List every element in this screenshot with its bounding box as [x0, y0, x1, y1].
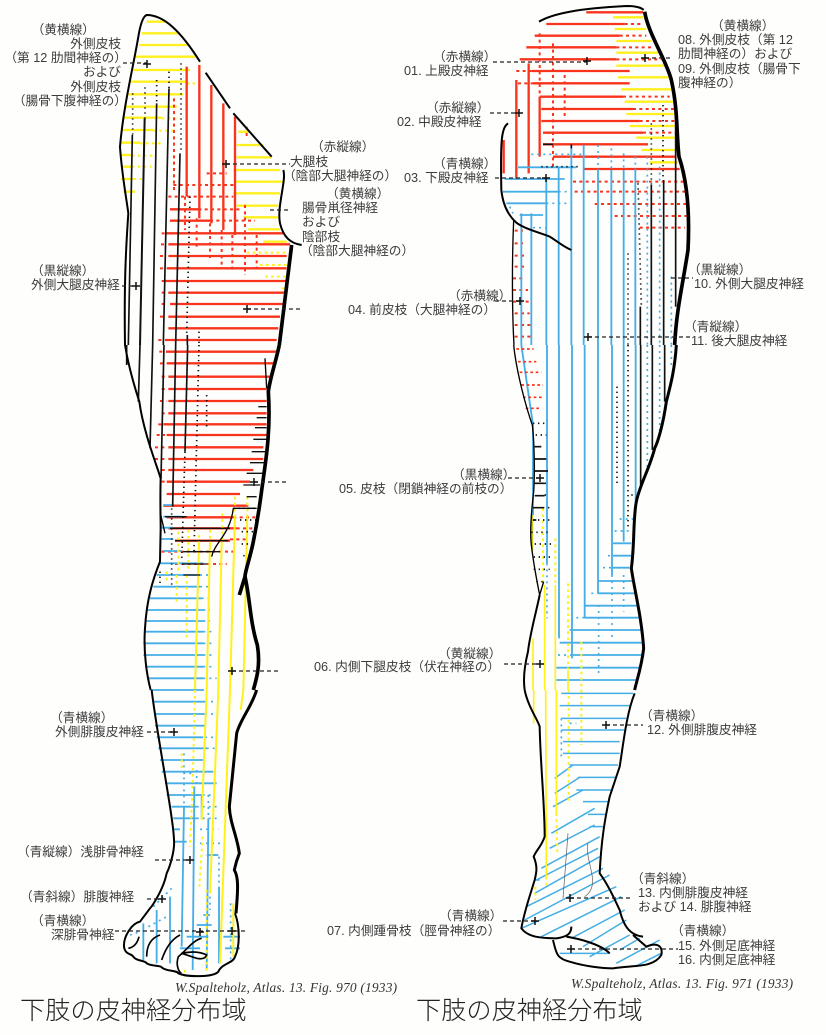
label: lateral sural cutaneous nerve, left: 外側腓腹皮神経	[55, 724, 144, 739]
label: deep peroneal nerve	[31, 913, 115, 942]
label: deep peroneal nerve: （青横線）	[31, 913, 94, 928]
label: femoral branch, left	[283, 139, 397, 183]
label: 01 superior cluneal nerve: 01. 上殿皮神経	[404, 64, 489, 78]
label: lateral femoral cutaneous nerve, left: 外側大腿皮神経	[31, 278, 120, 292]
title: left: 下肢の皮神経分布域	[20, 997, 247, 1025]
label: 15 and 16 plantar nerves	[671, 923, 776, 967]
label: 08 and 09 lateral cutaneous branches: 09. 外側皮枝（腸骨下	[678, 62, 801, 76]
label: 08 and 09 lateral cutaneous branches: 肋間神経の）および	[678, 47, 792, 61]
label: 05 cutaneous branch: （黒横線）	[452, 467, 515, 482]
leader lines and plus markers	[115, 54, 693, 953]
label: lateral cutaneous branches, left: 外側皮枝	[70, 80, 121, 94]
label: 04 anterior branch: 04. 前皮枝（大腿神経の）	[348, 302, 496, 317]
label: lateral cutaneous branches, left: および	[83, 65, 121, 79]
buttock and thigh: red, yellow, blue and black hatching with outline	[501, 6, 689, 345]
label: 12 lateral sural cutaneous nerve	[640, 708, 757, 737]
label: 10 lateral femoral cutaneous nerve: （黒縦線）	[688, 262, 751, 277]
label: 13 and 14 medial sural and sural nerves: 13. 内側腓腹皮神経	[638, 885, 748, 900]
label: 04 anterior branch: （赤横線）	[448, 288, 511, 303]
label: 04 anterior branch	[348, 288, 511, 317]
label: 06 medial crural cutaneous branch: 06. 内側下腿皮枝（伏在神経の）	[314, 660, 500, 674]
label: ilioinguinal nerve: （黄横線）	[326, 186, 389, 201]
label: 02 middle cluneal nerve: （赤縦線）	[426, 100, 489, 115]
label: 12 lateral sural cutaneous nerve: 12. 外側腓腹皮神経	[647, 722, 757, 737]
label: lateral sural cutaneous nerve, left: （青横線）	[50, 710, 113, 725]
label: 08 and 09 lateral cutaneous branches	[678, 18, 801, 90]
label: ilioinguinal nerve	[300, 186, 414, 258]
label: 01 superior cluneal nerve: （赤横線）	[433, 49, 496, 64]
label: 10 lateral femoral cutaneous nerve: 10. 外側大腿皮神経	[694, 277, 804, 291]
label: ilioinguinal nerve: 陰部枝	[302, 230, 340, 244]
label: 11 posterior femoral cutaneous nerve	[684, 319, 788, 348]
label: 11 posterior femoral cutaneous nerve: （青縦線）	[684, 319, 747, 334]
label: 15 and 16 plantar nerves: 15. 外側足底神経	[678, 939, 776, 953]
label: lateral femoral cutaneous nerve, left: （黒縦線）	[31, 263, 94, 278]
label: 06 medial crural cutaneous branch: （黄縦線）	[438, 646, 501, 661]
title: right: 下肢の皮神経分布域	[416, 997, 643, 1025]
label: 06 medial crural cutaneous branch	[314, 646, 501, 674]
label: 07 medial calcaneal branch: 07. 内側踵骨枝（脛骨神経の）	[327, 924, 500, 938]
caption: right figure source: W.Spalteholz, Atlas. 13. Fig. 971 (1933)	[571, 976, 794, 991]
figure: right leg posterior view	[501, 6, 689, 968]
label: femoral branch, left: （赤縦線）	[311, 139, 374, 154]
label: lateral cutaneous branches, left	[4, 22, 127, 108]
knee: red and blue hatching with outline	[125, 345, 279, 690]
label: lateral cutaneous branches, left: （第 12 肋間神経の）	[4, 50, 127, 65]
label: 03 inferior cluneal nerve	[404, 156, 496, 185]
knee: blue, yellow and black hatching with outline	[514, 345, 676, 690]
label: 12 lateral sural cutaneous nerve: （青横線）	[640, 708, 703, 723]
label: 03 inferior cluneal nerve: （青横線）	[433, 156, 496, 171]
label: 05 cutaneous branch: 05. 皮枝（閉鎖神経の前枝の）	[339, 481, 512, 496]
label: femoral branch, left: 大腿枝	[290, 155, 328, 169]
label: 11 posterior femoral cutaneous nerve: 11. 後大腿皮神経	[691, 334, 788, 348]
label: lateral femoral cutaneous nerve, left	[31, 263, 120, 292]
label: ilioinguinal nerve: （陰部大腿神経の）	[300, 244, 414, 258]
label: 10 lateral femoral cutaneous nerve	[688, 262, 804, 291]
label: lateral cutaneous branches, left: （腸骨下腹神経の）	[13, 93, 127, 108]
thigh top: yellow, red and black hatching with outline	[120, 15, 302, 345]
label: deep peroneal nerve: 深腓骨神経	[51, 927, 115, 942]
label: 08 and 09 lateral cutaneous branches: （黄横線）	[711, 18, 774, 33]
lower leg and foot: diagonal blue hatching with heel outline	[521, 690, 662, 968]
label: 13 and 14 medial sural and sural nerves: および 14. 腓腹神経	[638, 899, 752, 914]
label: 15 and 16 plantar nerves: （青横線）	[671, 923, 734, 938]
label: 13 and 14 medial sural and sural nerves: （青斜線）	[631, 871, 694, 886]
caption: left figure source: W.Spalteholz, Atlas. 13. Fig. 970 (1933)	[175, 980, 398, 995]
label: 05 cutaneous branch	[339, 467, 515, 496]
label: superficial peroneal nerve: （青縦線）浅腓骨神経	[17, 844, 144, 859]
label: ilioinguinal nerve: および	[302, 215, 340, 229]
label: 03 inferior cluneal nerve: 03. 下殿皮神経	[404, 171, 489, 185]
label: 07 medial calcaneal branch	[327, 908, 502, 938]
label: lateral cutaneous branches, left: 外側皮枝	[70, 37, 121, 51]
label: 08 and 09 lateral cutaneous branches: 腹神経の）	[678, 75, 741, 90]
lower leg and foot: blue and yellow hatching with toes	[124, 690, 257, 977]
label: 07 medial calcaneal branch: （青横線）	[439, 908, 502, 923]
label: lateral sural cutaneous nerve, left	[50, 710, 144, 739]
label: 08 and 09 lateral cutaneous branches: 08. 外側皮枝（第 12	[678, 32, 793, 47]
label: ilioinguinal nerve: 腸骨鼡径神経	[302, 201, 378, 215]
label: 02 middle cluneal nerve	[397, 100, 489, 129]
label: 02 middle cluneal nerve: 02. 中殿皮神経	[397, 115, 482, 129]
label: lateral cutaneous branches, left: （黄横線）	[32, 22, 95, 37]
figure: left leg anterior view	[120, 15, 302, 977]
label: femoral branch, left: （陰部大腿神経の）	[283, 169, 397, 183]
label: 15 and 16 plantar nerves: 16. 内側足底神経	[678, 953, 776, 967]
label: sural nerve: （青斜線）腓腹神経	[20, 889, 134, 904]
label: 01 superior cluneal nerve	[404, 49, 496, 78]
label: 13 and 14 medial sural and sural nerves	[631, 871, 752, 914]
